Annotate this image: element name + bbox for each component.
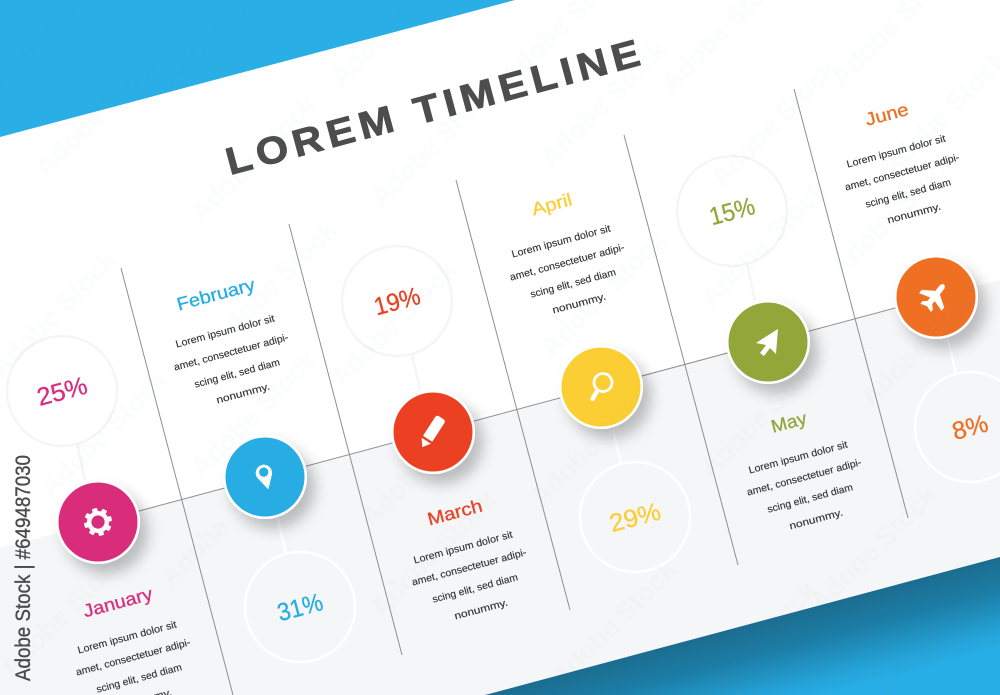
watermark pattern: Adobe Stock xyxy=(525,374,663,513)
watermark pattern: Adobe Stock xyxy=(805,479,943,618)
June node xyxy=(894,255,978,339)
June percent: 8% xyxy=(949,410,991,446)
April text: nonummy. xyxy=(551,292,607,316)
April text: scing elit, sed diam xyxy=(529,267,617,301)
May text xyxy=(746,439,863,532)
May text: scing elit, sed diam xyxy=(766,482,854,516)
April node xyxy=(559,345,643,429)
March text: scing elit, sed diam xyxy=(431,572,519,606)
watermark pattern: Adobe Stock xyxy=(365,484,503,623)
February text: Lorem ipsum dolor sit xyxy=(175,313,276,350)
top-left blue band xyxy=(0,0,515,137)
timeline axis line xyxy=(98,297,936,522)
stock id caption: Adobe Stock | #649487030 xyxy=(12,455,35,681)
watermark pattern: Adobe Stock xyxy=(155,454,293,593)
April text: Lorem ipsum dolor sit xyxy=(511,223,612,260)
watermark pattern: Adobe Stock xyxy=(365,74,503,213)
icon: airplane xyxy=(914,276,955,317)
January text: amet, consectetuer adipi- xyxy=(75,637,192,679)
icon: map pin xyxy=(254,463,276,492)
February text: scing elit, sed diam xyxy=(193,357,281,391)
March node xyxy=(391,390,475,474)
title: LOREM TIMELINE xyxy=(221,31,650,184)
February text: amet, consectetuer adipi- xyxy=(173,332,290,374)
June text xyxy=(844,133,961,226)
watermark pattern: Adobe Stock xyxy=(695,174,833,313)
April xyxy=(509,189,664,538)
March percent: 19% xyxy=(371,282,424,321)
March text: amet, consectetuer adipi- xyxy=(411,547,528,589)
watermark pattern: Adobe Stock xyxy=(855,274,993,413)
watermark pattern: Adobe Stock xyxy=(695,344,833,483)
January xyxy=(34,372,192,695)
March xyxy=(371,282,528,622)
May text: Lorem ipsum dolor sit xyxy=(748,439,849,476)
watermark pattern: Adobe Stock xyxy=(535,224,673,363)
percent rings xyxy=(7,156,1000,662)
May node xyxy=(726,300,810,384)
May xyxy=(706,192,863,532)
February xyxy=(173,274,326,627)
January percent: 25% xyxy=(34,372,90,412)
March text: nonummy. xyxy=(453,598,509,622)
bottom-right blue band xyxy=(485,557,1000,695)
watermark pattern: Adobe Stock xyxy=(535,34,673,173)
January heading: January xyxy=(81,584,155,621)
February heading: February xyxy=(175,274,257,314)
watermark pattern: Adobe Stock xyxy=(355,394,493,533)
May text: amet, consectetuer adipi- xyxy=(746,457,863,499)
watermark pattern: Adobe Stock xyxy=(185,344,323,483)
May text: nonummy. xyxy=(788,508,844,532)
January text: scing elit, sed diam xyxy=(95,662,183,695)
watermark pattern: Adobe Stock xyxy=(825,144,963,283)
March text: Lorem ipsum dolor sit xyxy=(413,529,514,566)
icon: gear xyxy=(81,505,115,539)
May percent: 15% xyxy=(706,192,758,231)
April text: amet, consectetuer adipi- xyxy=(509,242,626,284)
June text: amet, consectetuer adipi- xyxy=(844,152,961,194)
icon: cursor arrow xyxy=(756,329,778,356)
January node xyxy=(56,480,140,564)
April text xyxy=(509,223,626,316)
March text xyxy=(411,529,528,622)
January text xyxy=(75,619,192,695)
March heading: March xyxy=(425,496,484,529)
watermark pattern: Adobe Stock xyxy=(185,89,323,228)
icon: pencil xyxy=(418,415,446,450)
February text xyxy=(173,313,290,406)
watermark pattern: Adobe Stock xyxy=(30,44,168,183)
February text: nonummy. xyxy=(215,382,271,406)
watermark pattern: Adobe Stock xyxy=(35,364,173,503)
watermark pattern: Adobe Stock xyxy=(705,54,843,193)
April percent: 29% xyxy=(606,497,664,538)
column divider lines xyxy=(121,89,908,695)
February percent: 31% xyxy=(274,588,326,627)
June text: nonummy. xyxy=(886,202,942,226)
watermark pattern: Adobe Stock xyxy=(205,214,343,353)
icon: magnifier xyxy=(592,374,612,399)
May heading: May xyxy=(769,408,809,437)
February node xyxy=(223,435,307,519)
watermark pattern: Adobe Stock xyxy=(325,254,463,393)
June xyxy=(844,99,991,446)
lower grey panel xyxy=(0,280,1000,695)
watermark pattern: Adobe Stock xyxy=(545,554,683,693)
January text: Lorem ipsum dolor sit xyxy=(77,619,178,656)
April heading: April xyxy=(529,189,574,219)
June text: scing elit, sed diam xyxy=(864,177,952,211)
June text: Lorem ipsum dolor sit xyxy=(846,133,947,170)
June heading: June xyxy=(863,99,911,130)
